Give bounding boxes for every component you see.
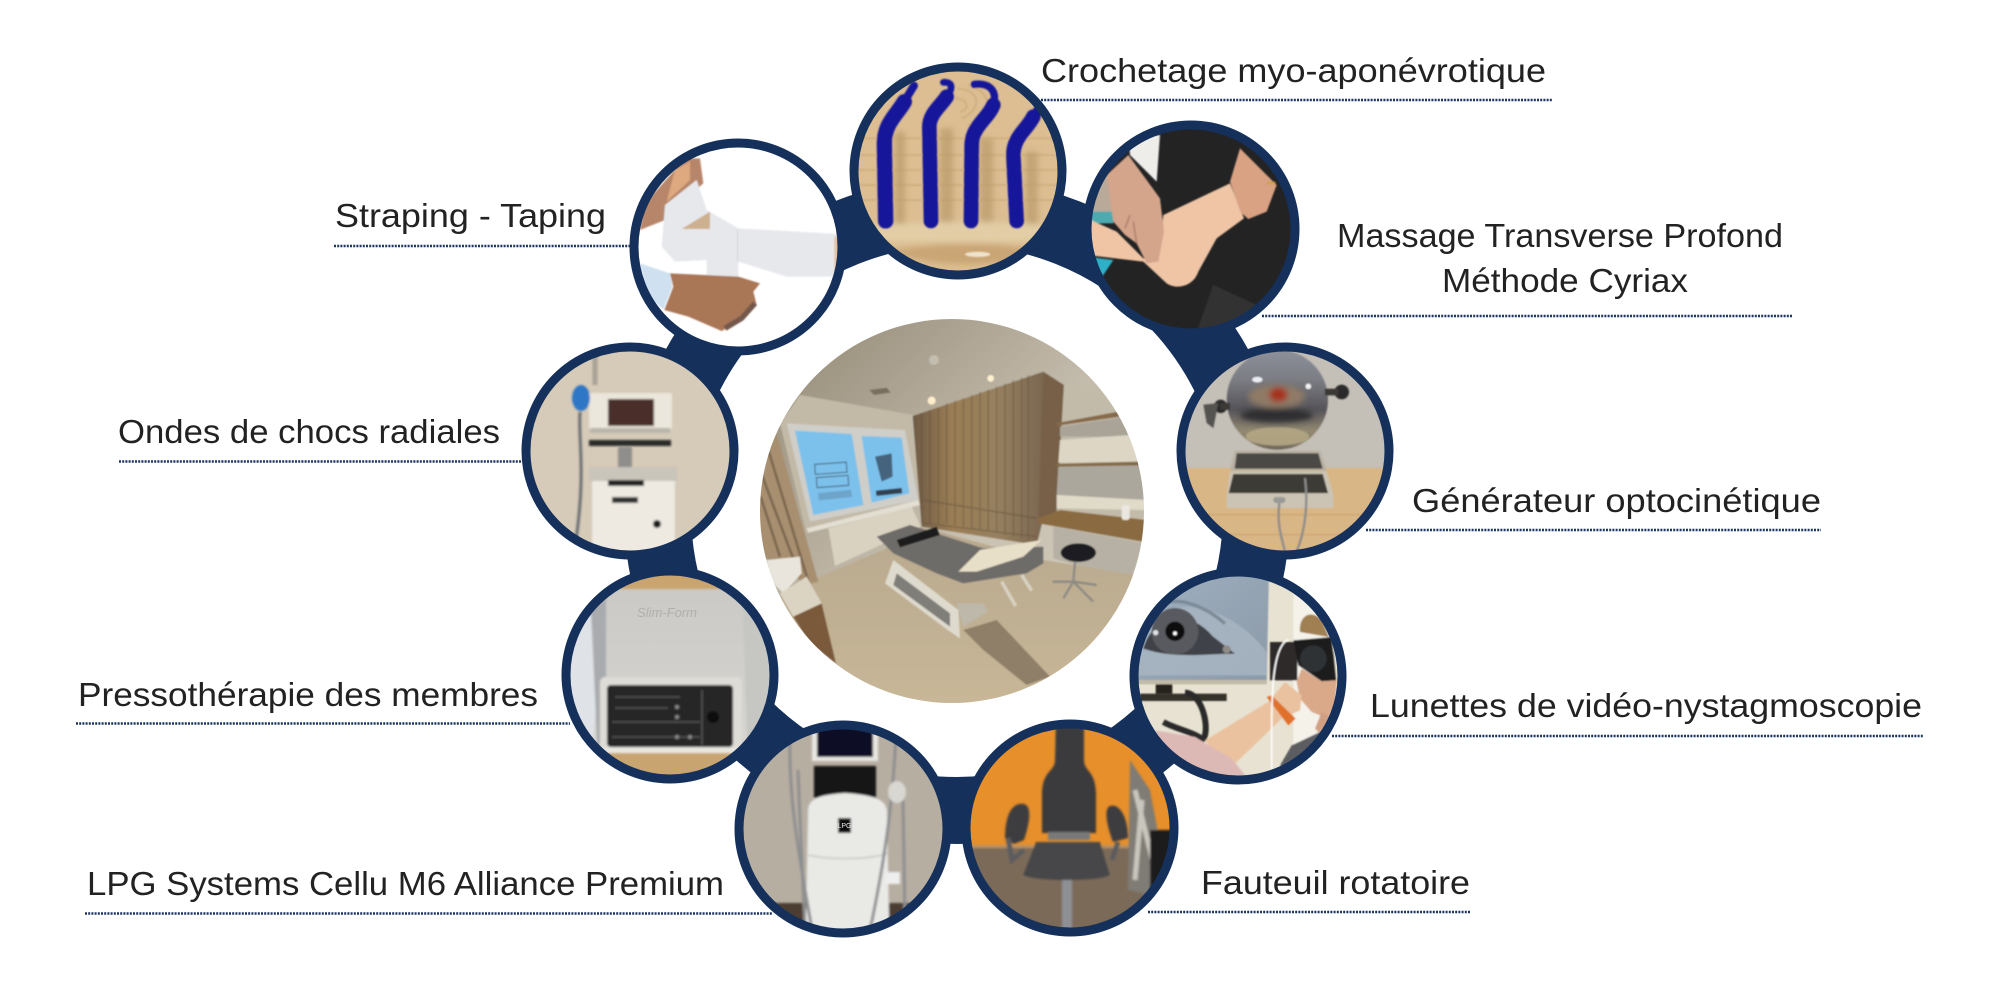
label: Lunettes de vidéo-nystagmoscopie: Lunettes de vidéo-nystagmoscopie bbox=[1370, 687, 1922, 724]
label: Pressothérapie des membres: Pressothérapie des membres bbox=[78, 676, 538, 713]
label: Massage Transverse Profond Méthode Cyriax: Massage Transverse Profond bbox=[1337, 217, 1783, 254]
label: Fauteuil rotatoire: Fauteuil rotatoire bbox=[1201, 864, 1470, 901]
label: Massage Transverse Profond Méthode Cyriax: Méthode Cyriax bbox=[1442, 262, 1689, 299]
border bbox=[1181, 347, 1389, 555]
label: Straping - Taping: Straping - Taping bbox=[335, 197, 606, 234]
border bbox=[1134, 572, 1342, 780]
label: Ondes de chocs radiales: Ondes de chocs radiales bbox=[118, 413, 500, 450]
node: optokinetic generator photo bbox=[1170, 338, 1400, 568]
label: LPG Systems Cellu M6 Alliance Premium: LPG Systems Cellu M6 Alliance Premium bbox=[87, 865, 724, 902]
node: LPG machine photo: LPG bbox=[837, 823, 852, 830]
label: Générateur optocinétique: Générateur optocinétique bbox=[1412, 482, 1821, 519]
ceiling bbox=[766, 319, 1097, 596]
border bbox=[966, 724, 1174, 932]
node: shockwave device photo bbox=[522, 340, 738, 560]
node: crochetage hooks photo bbox=[845, 55, 1075, 285]
border bbox=[526, 347, 734, 555]
border bbox=[854, 67, 1062, 275]
node: pressotherapy photo: Slim-Form bbox=[637, 605, 697, 620]
border bbox=[566, 571, 774, 779]
label: Massage Transverse Profond Méthode Cyriax bbox=[1262, 217, 1793, 316]
node: video-nystagmoscopy photo bbox=[1130, 570, 1346, 784]
node: massage photo bbox=[1085, 120, 1300, 330]
border bbox=[634, 143, 842, 351]
border bbox=[739, 725, 947, 933]
node: pressotherapy photo bbox=[562, 567, 778, 784]
node: rotary chair photo bbox=[962, 720, 1180, 937]
label: Crochetage myo-aponévrotique: Crochetage myo-aponévrotique bbox=[1041, 52, 1546, 89]
node: LPG machine photo bbox=[735, 721, 951, 937]
border bbox=[1087, 125, 1295, 333]
connecting ring bbox=[658, 212, 1256, 810]
mirror-ball reflections bbox=[1240, 385, 1313, 423]
central photo: treatment room bbox=[760, 319, 1144, 703]
node: strapping photo bbox=[630, 138, 844, 356]
